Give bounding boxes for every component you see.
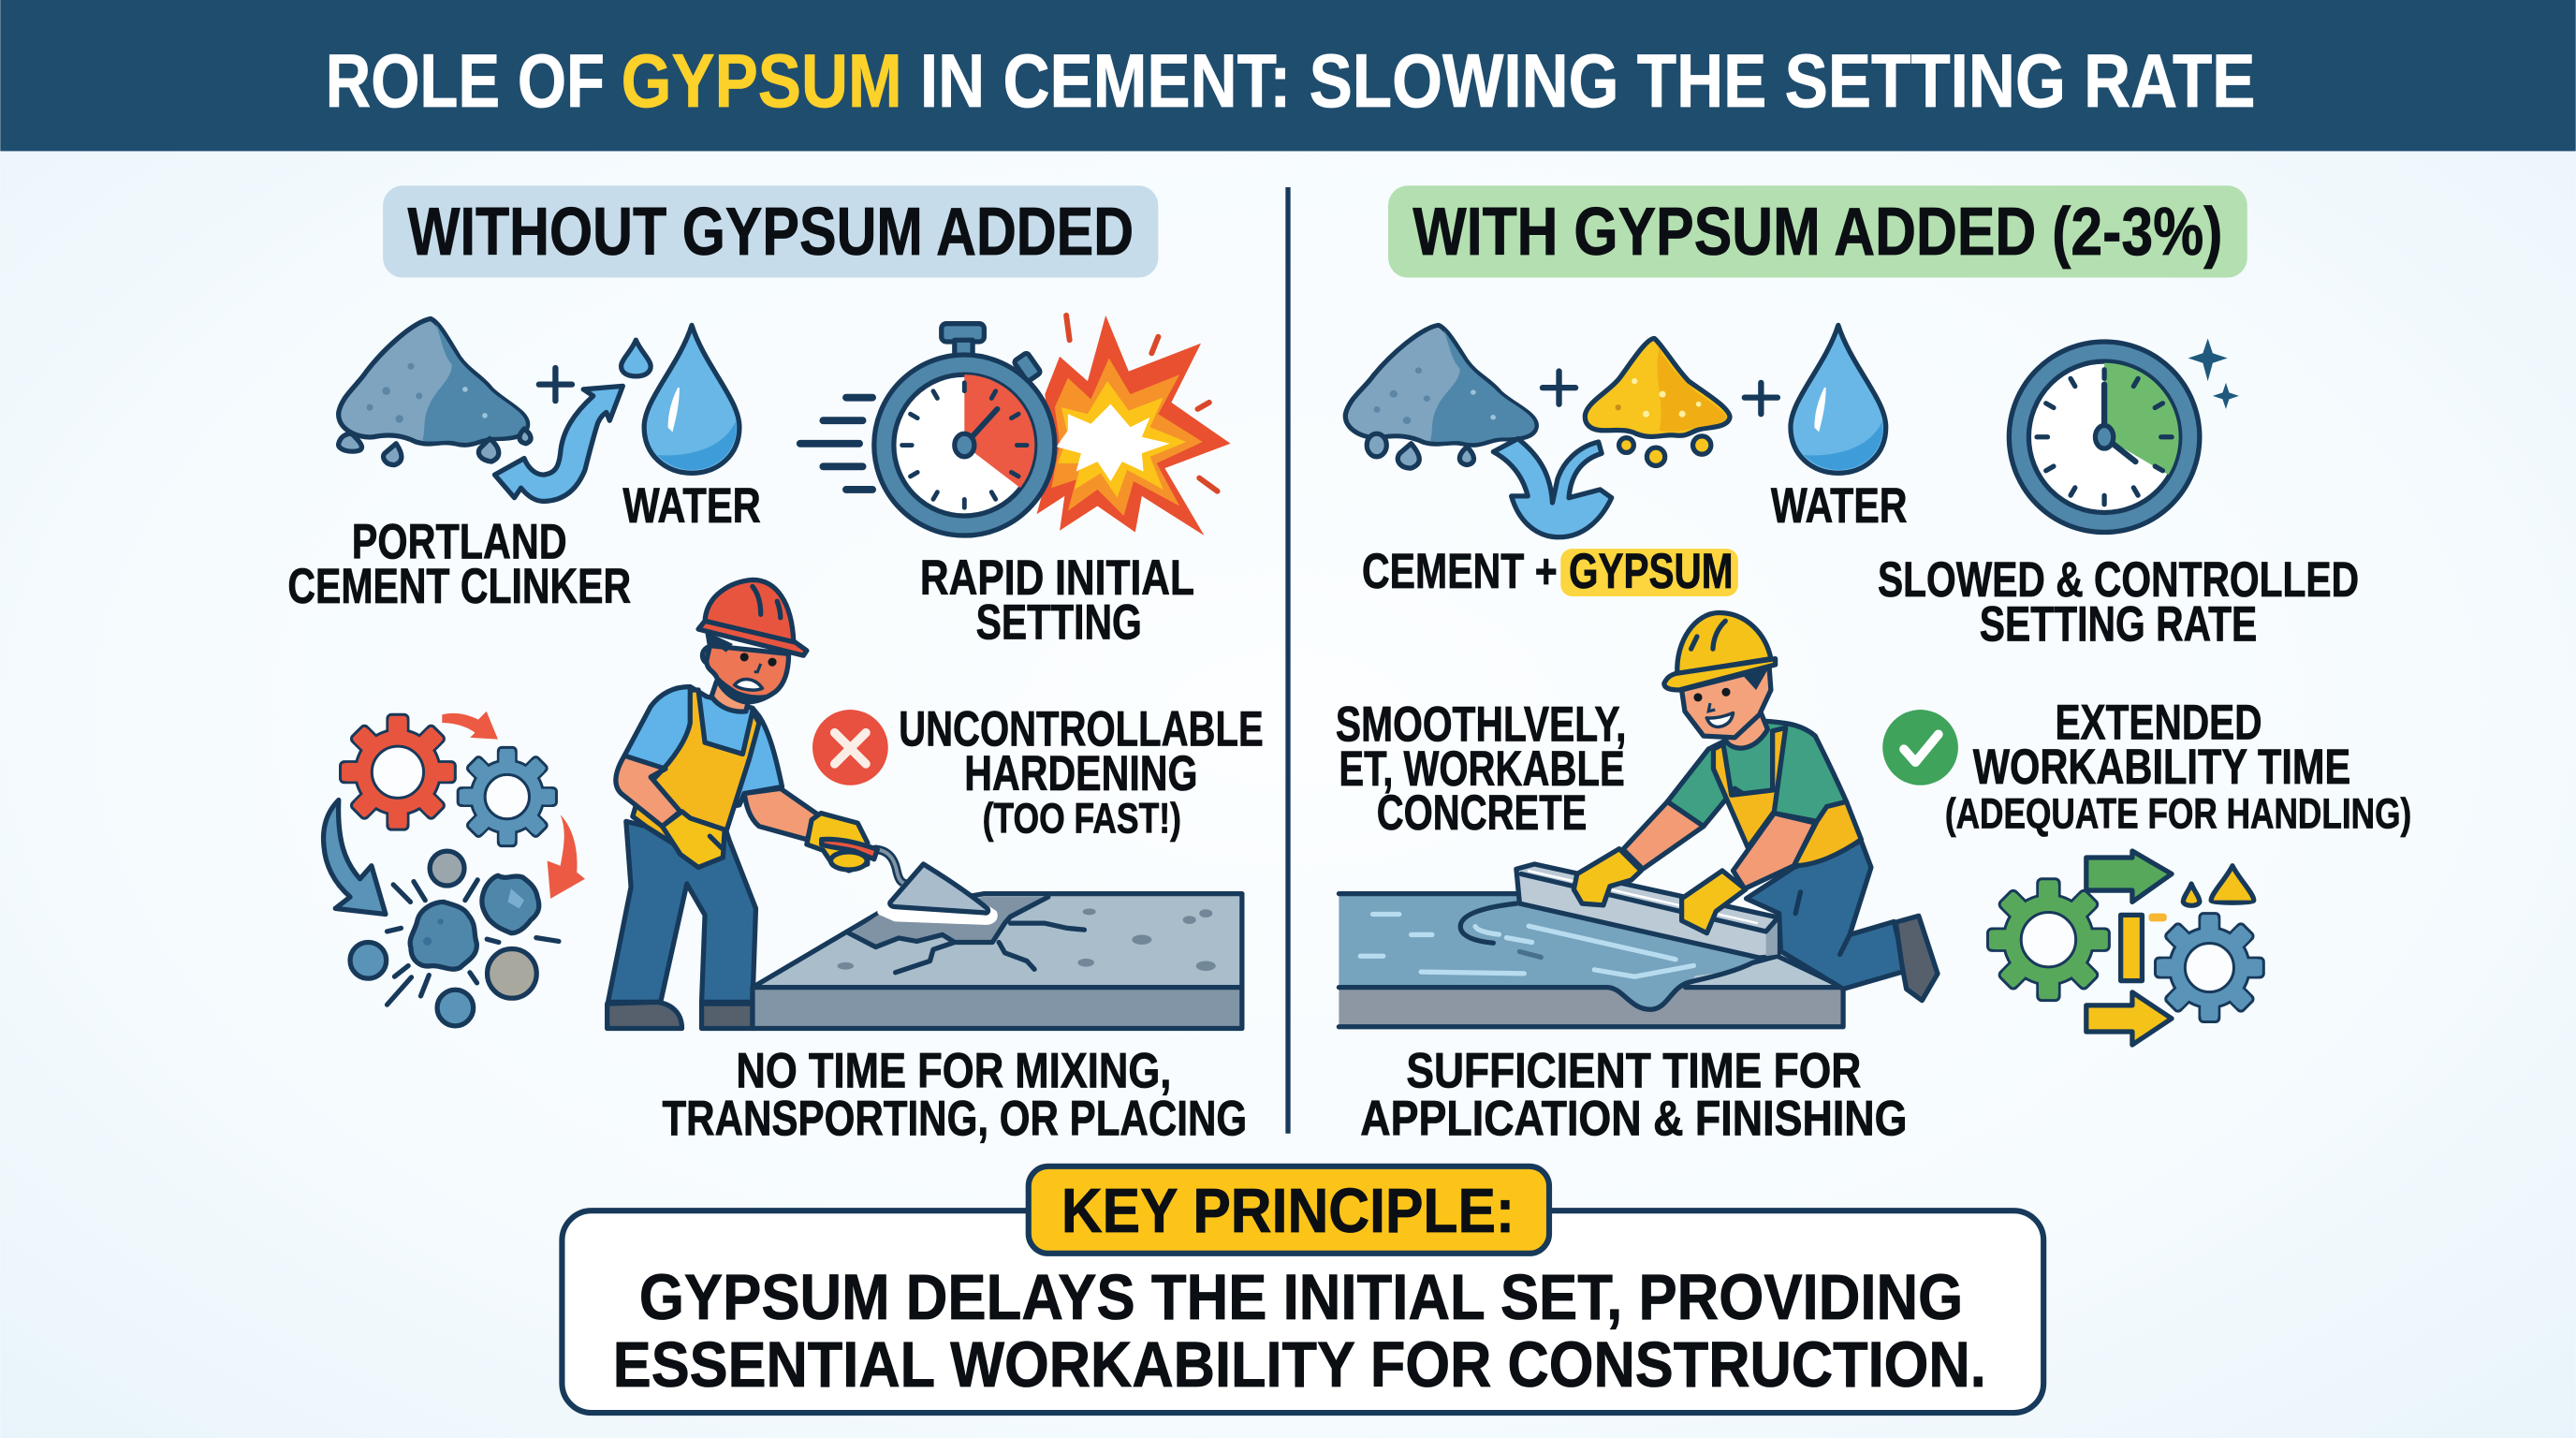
icon: red x mark [812,710,888,785]
icon: explosion burst [1037,315,1231,536]
label: sufficient time [1360,1044,1908,1147]
title banner: ROLE OF [326,39,605,124]
icon: water drop [644,325,739,473]
icon: breaking gears and clinker particles [324,712,585,1026]
label: rapid initial setting: SETTING [976,595,1142,651]
icon: cement clinker pile [339,318,531,465]
icon: smooth gears with flow arrows [1988,851,2263,1045]
label: slowed and controlled setting rate: SLOWED & CONTROLLED [1878,552,2359,608]
panel: without gypsum [287,185,1264,1147]
icon: clock [2009,342,2200,533]
label: uncontrollable hardening: UNCONTROLLABLE [899,702,1264,757]
icon: curved mixing arrow [494,386,622,501]
label: cement plus gypsum: GYPSUM [1569,544,1734,599]
icon: speed lines [800,398,872,490]
label: extended workability time: EXTENDED [2055,696,2262,751]
label: smoothly wet workable concrete: CONCRETE [1377,785,1587,841]
label: sufficient time: APPLICATION & FINISHING [1360,1092,1908,1147]
worker: happily screeding concrete [1516,613,1938,1001]
label: uncontrollable hardening [899,702,1264,843]
center divider [1286,187,1290,1134]
icon: gypsum pile [1585,338,1730,465]
icon: stopwatch [874,324,1055,536]
label: no time for mixing: TRANSPORTING, OR PLACING [662,1092,1247,1147]
label: portland cement clinker: PORTLAND [352,515,567,570]
label: cement plus gypsum: CEMENT + [1362,544,1558,599]
label: extended workability time [1945,696,2411,837]
icon: green check mark [1882,710,1958,785]
label: uncontrollable hardening: HARDENING [964,746,1197,801]
label: uncontrollable hardening: (TOO FAST!) [983,795,1181,843]
label: extended workability time: (ADEQUATE FOR HANDLING) [1945,789,2411,837]
key principle statement: GYPSUM DELAYS THE INITIAL SET, PROVIDING [639,1261,1963,1333]
label: slowed and controlled setting rate: SETTING RATE [1980,596,2257,652]
panel: with gypsum [1336,185,2411,1147]
label: water: WATER [622,478,761,534]
icon: plus sign [1745,383,1778,414]
title banner: GYPSUM [622,39,902,124]
cracked concrete slab with trowel [753,864,1242,1028]
heading: without gypsum added [383,185,1158,278]
title banner: IN CEMENT: SLOWING THE SETTING RATE [920,39,2256,124]
label: smoothly wet workable concrete: ET, WORKABLE [1339,741,1625,797]
key principle statement: ESSENTIAL WORKABILITY FOR CONSTRUCTION. [613,1328,1986,1401]
key principle statement [613,1261,1986,1401]
label: smoothly wet workable concrete: SMOOTHLVELY, [1336,697,1626,752]
icon: cement pile [1345,325,1536,468]
label: portland cement clinker [287,515,631,614]
icon: plus sign [539,368,572,401]
label: slowed and controlled setting rate [1878,552,2359,652]
label: smoothly wet workable concrete [1336,697,1626,841]
key principle tab: KEY PRINCIPLE: [1061,1177,1515,1246]
label: no time for mixing: NO TIME FOR MIXING, [736,1044,1171,1099]
icon: small water drop [622,340,651,376]
label: water: WATER [1771,478,1908,534]
title banner [0,0,2576,151]
label: rapid initial setting: RAPID INITIAL [920,550,1194,606]
icon: merging arrow [1493,439,1612,537]
label: sufficient time: SUFFICIENT TIME FOR [1406,1044,1861,1099]
label: extended workability time: WORKABILITY TIME [1973,740,2350,795]
wet concrete slab with spill [1339,894,1843,1027]
label: rapid initial setting [920,550,1194,651]
icon: sparkles [2188,338,2239,409]
worker: struggling with fast setting cement [607,580,905,1028]
label: cement plus gypsum [1362,544,1738,599]
icon: water drop [1791,325,1886,473]
label: portland cement clinker: CEMENT CLINKER [287,559,631,614]
heading: without gypsum added: WITHOUT GYPSUM ADDED [407,195,1134,270]
heading: with gypsum added: WITH GYPSUM ADDED (2-3%) [1412,195,2222,270]
callout: key principle [562,1167,2043,1413]
label: no time for mixing [662,1044,1247,1147]
icon: plus sign [1543,372,1575,404]
